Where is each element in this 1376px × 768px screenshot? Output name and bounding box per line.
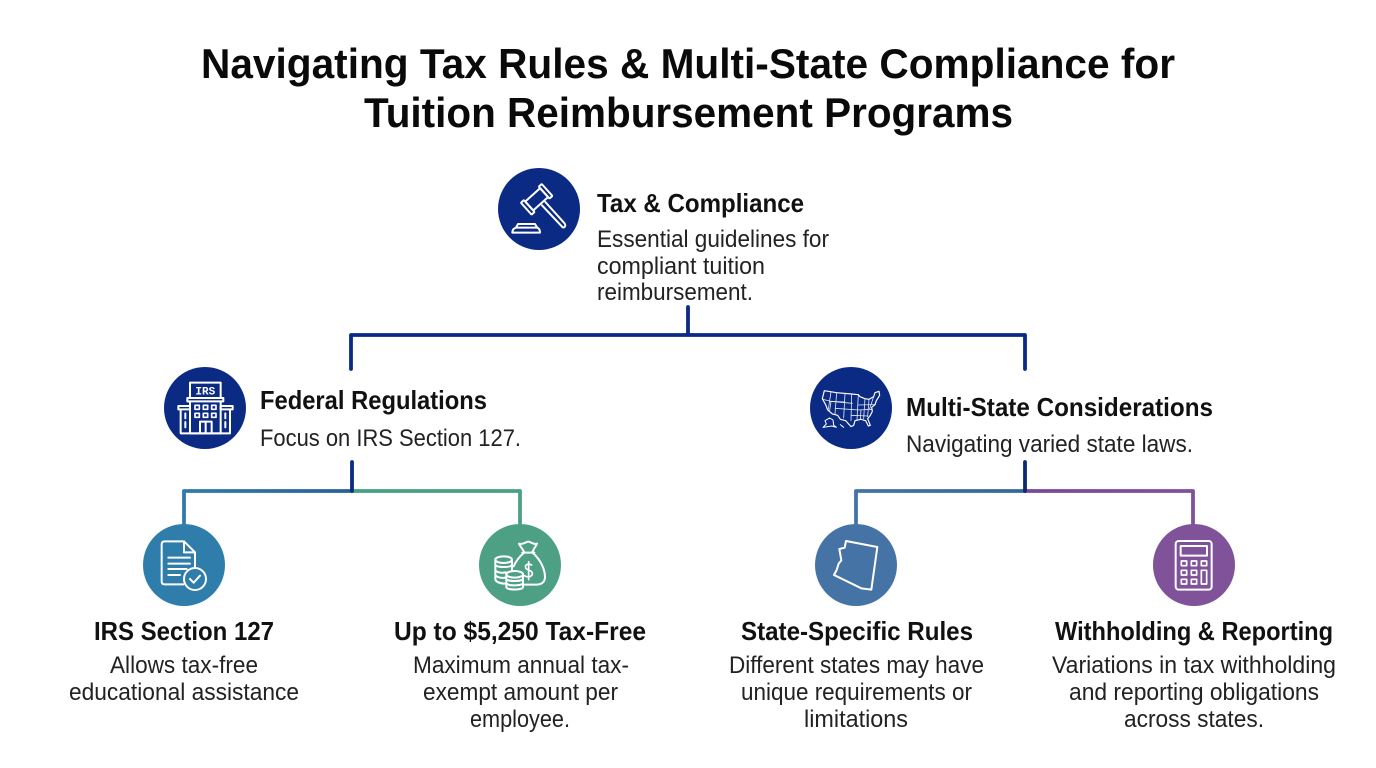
icon: money bag and coins bbox=[479, 524, 561, 606]
panel: federal regulations bbox=[164, 367, 521, 452]
description: educational assistance bbox=[69, 679, 299, 706]
description: Focus on IRS Section 127. bbox=[260, 425, 521, 452]
description: Maximum annual tax- bbox=[413, 652, 629, 679]
description bbox=[729, 652, 984, 733]
description bbox=[1052, 652, 1336, 733]
description: exempt amount per bbox=[423, 679, 618, 706]
description: reimbursement. bbox=[597, 279, 753, 306]
icon: document with check bbox=[143, 524, 225, 606]
description: Different states may have bbox=[729, 652, 984, 679]
heading: Withholding & Reporting bbox=[1055, 616, 1333, 646]
description: limitations bbox=[804, 706, 908, 733]
icon: IRS building: IRS bbox=[195, 386, 216, 398]
description: Variations in tax withholding bbox=[1052, 652, 1336, 679]
panel: withholding and reporting bbox=[1052, 524, 1336, 733]
description: and reporting obligations bbox=[1069, 679, 1319, 706]
icon: USA map bbox=[810, 367, 892, 449]
title: Navigating Tax Rules & Multi-State Compliance for bbox=[201, 40, 1175, 87]
panel: IRS section 127 bbox=[69, 524, 299, 706]
heading: State-Specific Rules bbox=[741, 616, 973, 646]
connector: multi-state branch bbox=[856, 462, 1193, 525]
description: employee. bbox=[470, 706, 570, 733]
heading: Federal Regulations bbox=[260, 385, 487, 415]
heading: IRS Section 127 bbox=[94, 616, 274, 646]
heading: Tax & Compliance bbox=[597, 188, 804, 218]
panel: up to $5,250 tax-free bbox=[394, 524, 646, 733]
connector: root to branches bbox=[351, 307, 1025, 369]
description bbox=[69, 652, 299, 706]
description: Navigating varied state laws. bbox=[906, 431, 1193, 458]
icon: IRS building bbox=[164, 367, 246, 449]
description bbox=[413, 652, 629, 733]
panel: tax and compliance bbox=[498, 168, 829, 306]
heading: Multi-State Considerations bbox=[906, 392, 1213, 422]
panel: state-specific rules bbox=[729, 524, 984, 733]
description bbox=[597, 226, 829, 306]
description: across states. bbox=[1124, 706, 1264, 733]
heading: Up to $5,250 Tax-Free bbox=[394, 616, 646, 646]
title: Tuition Reimbursement Programs bbox=[364, 89, 1013, 136]
icon: gavel bbox=[498, 168, 580, 250]
description: unique requirements or bbox=[741, 679, 972, 706]
connector: federal branch bbox=[184, 462, 520, 525]
description: Allows tax-free bbox=[110, 652, 258, 679]
description: compliant tuition bbox=[597, 253, 765, 280]
icon: Arizona outline bbox=[815, 524, 897, 606]
title bbox=[201, 40, 1175, 136]
icon: calculator bbox=[1153, 524, 1235, 606]
description: Essential guidelines for bbox=[597, 226, 829, 253]
panel: multi-state considerations bbox=[810, 367, 1213, 458]
